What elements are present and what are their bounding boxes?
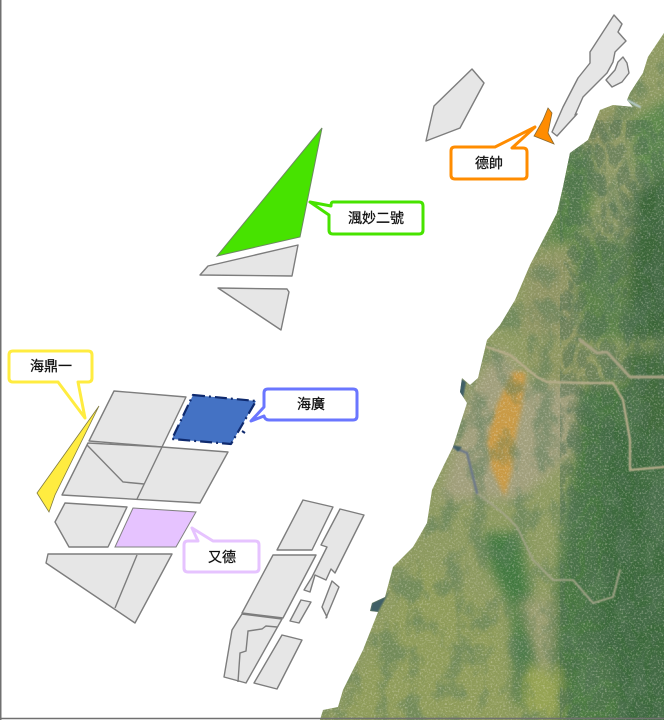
zones below Fengmiao 2 [200,245,298,330]
callout: Fengmiao 2: 渢妙二號 [348,210,404,226]
callout: Haiguang: 海廣 [297,396,325,412]
zone: Fengmiao 2 green [217,128,322,256]
south wind farm zones [224,500,364,689]
callout: Haiguang [251,389,357,421]
rivers [453,100,664,603]
callout: Youde [184,528,259,572]
callout: Youde: 又德 [208,549,236,565]
coastal water [370,358,482,612]
orange hill patch [487,372,526,497]
zone: Deshuai orange [534,108,554,144]
callout: Haiding 1 [9,351,92,418]
callout: Haiding 1: 海鼎一 [30,358,72,374]
zone: Youde purple [115,508,196,547]
land: Taiwan satellite map [300,0,664,720]
callout: Fengmiao 2 [310,202,423,234]
central wind farm zones [46,391,228,623]
callout: Deshuai [451,127,535,179]
zone: Haiguang blue [172,395,256,444]
zone: Haiding 1 yellow [37,406,99,512]
north wind farm zones [426,15,629,141]
callout: Deshuai: 德帥 [475,155,503,171]
